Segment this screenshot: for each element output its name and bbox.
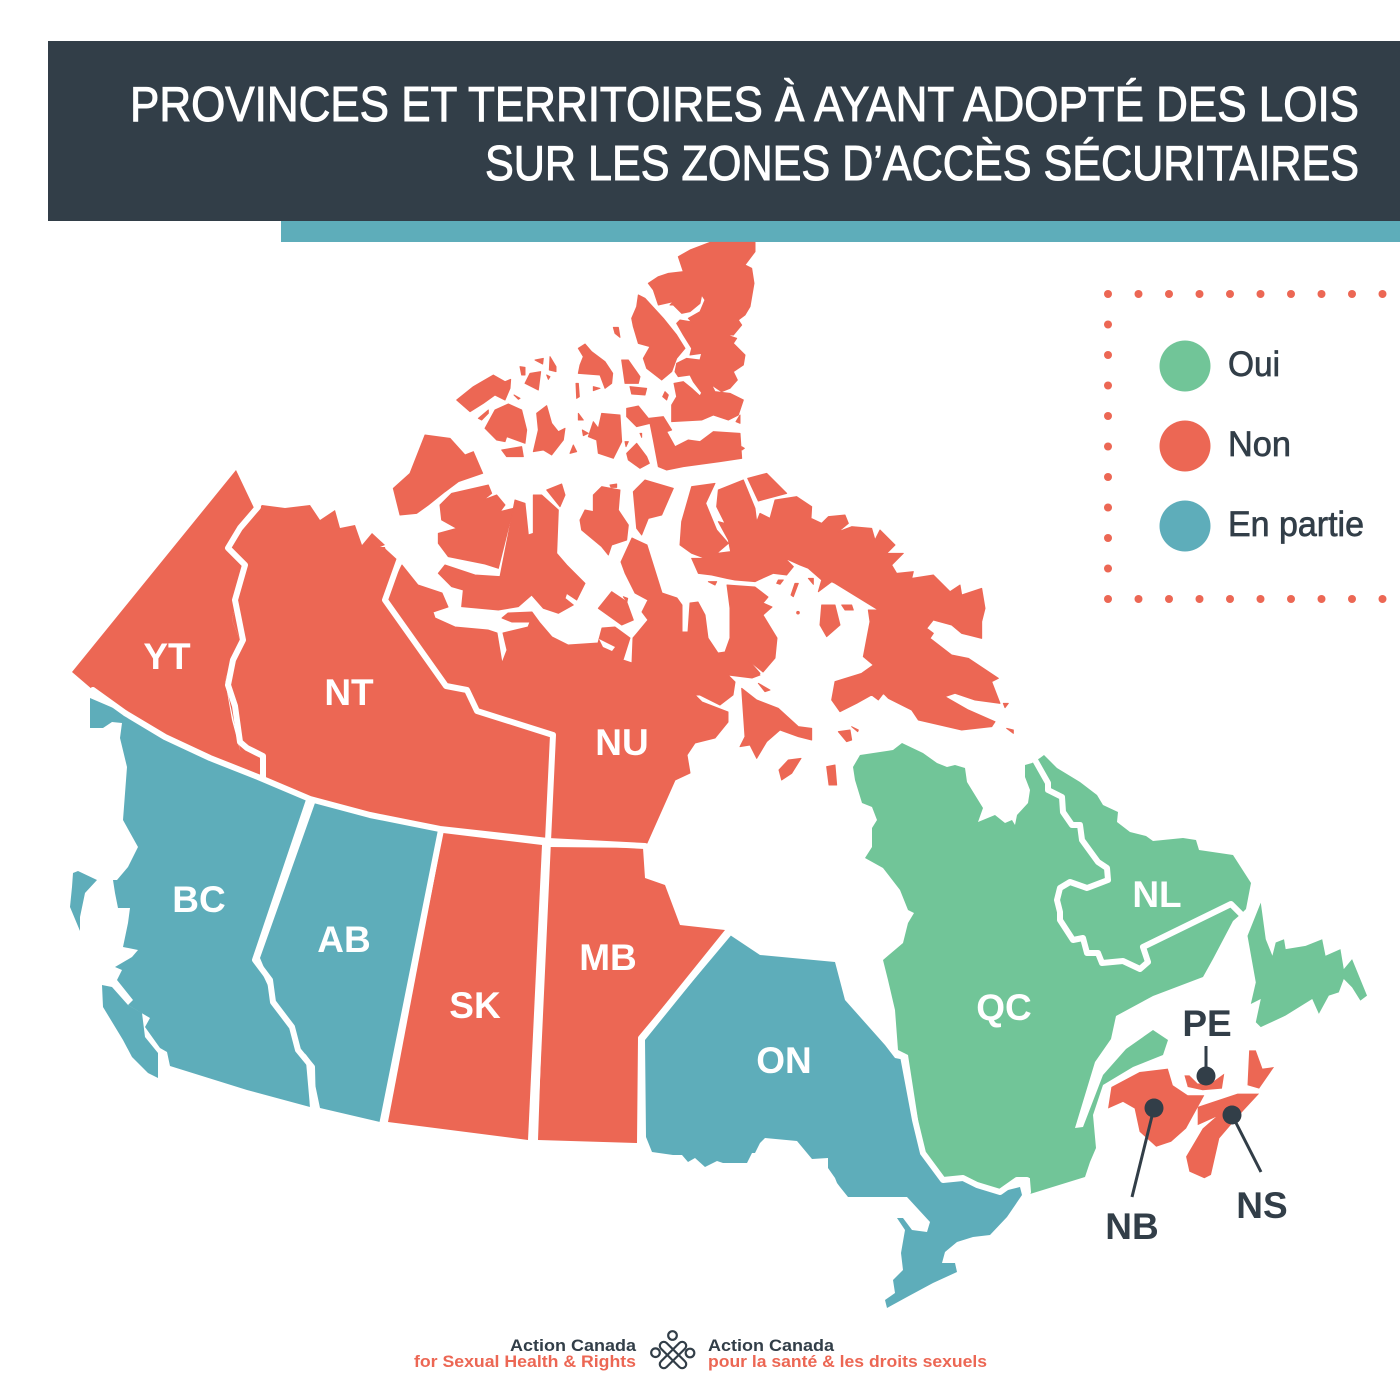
Maritime callouts: NB — [1105, 1206, 1159, 1247]
province labels — [143, 636, 1182, 1081]
Ontario ON — [645, 935, 1022, 1308]
Arctic islands west — [393, 435, 673, 625]
Nunavut mainland — [385, 538, 777, 843]
Newfoundland — [1248, 903, 1367, 1027]
legend labels: Oui — [1228, 345, 1280, 384]
legend — [1104, 290, 1386, 603]
logo text French: pour la santé & les droits sexuels — [708, 1352, 987, 1371]
logo text English: for Sexual Health & Rights — [414, 1352, 636, 1371]
logo text English: Action Canada — [510, 1336, 637, 1355]
province labels: NU — [595, 722, 649, 763]
Maritime callouts: NS — [1236, 1185, 1288, 1226]
Yukon YT — [72, 470, 262, 778]
province labels: BC — [172, 879, 226, 920]
Nunavut inlets — [471, 612, 615, 651]
Baffin Island and Hudson Strait islands — [680, 473, 1013, 785]
Quebec and Labrador — [853, 743, 1251, 1194]
title — [130, 78, 1359, 191]
legend swatches — [1160, 340, 1210, 552]
province labels: ON — [756, 1040, 812, 1081]
province labels: SK — [449, 985, 501, 1026]
map of Canada — [70, 242, 1367, 1308]
Maritime callouts: PE — [1182, 1003, 1232, 1044]
province labels: QC — [976, 987, 1032, 1028]
provincial borders — [93, 507, 1241, 1192]
legend labels — [1228, 345, 1364, 544]
logo text French: Action Canada — [708, 1336, 835, 1355]
logo — [414, 1331, 987, 1371]
province labels: AB — [317, 919, 371, 960]
title banner — [48, 41, 1400, 242]
logo text English — [414, 1336, 637, 1371]
Alberta AB — [260, 803, 440, 1122]
Saskatchewan SK — [388, 833, 542, 1140]
Northwest Territories NT — [225, 505, 552, 841]
province labels: NT — [324, 672, 374, 713]
Arctic islands north — [457, 242, 755, 470]
legend labels: Non — [1228, 425, 1291, 464]
province labels: MB — [579, 937, 637, 978]
logo text French — [708, 1336, 987, 1371]
legend labels: En partie — [1228, 505, 1364, 544]
Maritime callouts — [1105, 1003, 1288, 1247]
British Columbia BC — [70, 698, 310, 1107]
legend dotted frame — [1104, 290, 1386, 603]
Maritime provinces — [1108, 1050, 1274, 1178]
province labels: YT — [143, 636, 191, 677]
Manitoba MB — [538, 847, 725, 1143]
province labels: NL — [1132, 874, 1182, 915]
logo icon — [651, 1331, 694, 1370]
